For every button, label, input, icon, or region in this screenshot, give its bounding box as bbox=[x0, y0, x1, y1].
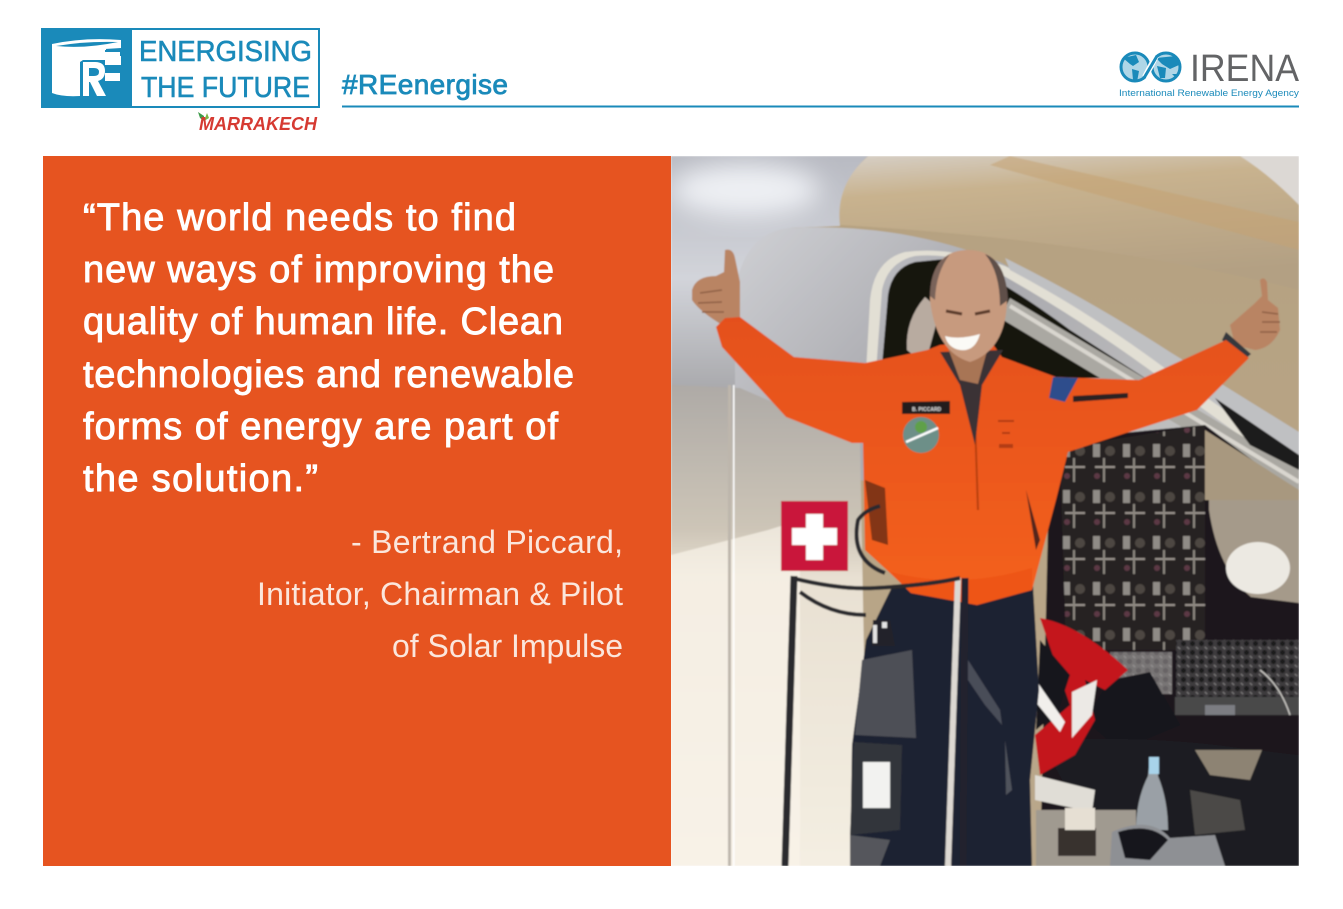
photo: cockpit strut bbox=[1000, 298, 1299, 500]
icon: Marrakech leaf bbox=[198, 112, 209, 121]
photo: stanchions and rope bbox=[785, 506, 965, 866]
photo: chest marks bbox=[998, 420, 1014, 448]
attribution: of Solar Impulse bbox=[392, 628, 623, 664]
attribution bbox=[257, 524, 623, 664]
logo: IRENA bbox=[1119, 48, 1300, 99]
photo: cabin interior right bbox=[1040, 424, 1299, 811]
quote text: new ways of improving the bbox=[83, 249, 554, 291]
attribution: Initiator, Chairman & Pilot bbox=[257, 576, 623, 612]
photo: dark bag bbox=[1108, 672, 1163, 696]
photo: arm skin, hands bbox=[692, 250, 1280, 350]
logo: blue RE emblem bbox=[41, 28, 131, 108]
photo: Swiss flag bbox=[781, 501, 848, 571]
photo: door frame bbox=[866, 250, 1244, 437]
logo text: agency name: International Renewable Energy Agency bbox=[1119, 88, 1299, 99]
photo: round window bbox=[1209, 500, 1299, 603]
photo: neck and collar bbox=[940, 350, 1003, 445]
photo: keys bbox=[872, 619, 877, 626]
photo: jacket bbox=[716, 317, 1249, 605]
photo: cockpit opening bbox=[882, 258, 1144, 380]
quote text: forms of energy are part of bbox=[83, 406, 558, 448]
photo: water bottle bbox=[1136, 757, 1168, 830]
attribution: - Bertrand Piccard, bbox=[351, 524, 623, 560]
photo: pilot with thumbs up at aircraft cockpit: B. PICCARD bbox=[912, 407, 942, 413]
logo: Energising the Future bbox=[41, 28, 319, 134]
photo: smile bbox=[945, 334, 980, 350]
photo: red life vest bbox=[1035, 618, 1128, 775]
quote text: “The world needs to find bbox=[83, 197, 516, 239]
photo background: wing and sky bbox=[796, 224, 1299, 866]
logo text: IRENA: IRENA bbox=[1190, 48, 1300, 90]
icon: infinity globes bbox=[1121, 53, 1180, 82]
quote text: the solution.” bbox=[83, 458, 318, 500]
photo: mission patch bbox=[903, 417, 939, 453]
photo: silver nacelle bbox=[734, 226, 1233, 481]
logo text: THE FUTURE: THE FUTURE bbox=[141, 72, 310, 104]
photo: wrist watch bbox=[1222, 332, 1251, 360]
photo: head bbox=[930, 250, 1007, 362]
quote text: quality of human life. Clean bbox=[83, 301, 563, 343]
photo: white cockpit edge bbox=[1215, 398, 1299, 470]
quote text bbox=[83, 197, 574, 500]
photo: pants bbox=[850, 585, 1039, 866]
photo: lower fuselage bbox=[671, 385, 868, 866]
photo: grey bag bottom bbox=[1110, 825, 1225, 866]
photo: control panel bbox=[1060, 425, 1205, 650]
photo: silver band above cockpit bbox=[1005, 258, 1299, 462]
photo: arm badge bbox=[1049, 377, 1078, 402]
photo: lower right switch panel bbox=[1176, 640, 1299, 698]
logo: outlined title box bbox=[131, 29, 319, 107]
logo text: MARRAKECH: MARRAKECH bbox=[199, 113, 318, 134]
header rule bbox=[342, 106, 1299, 108]
photo: knee label bbox=[863, 762, 890, 808]
photo: shelf and equipment bbox=[1175, 697, 1299, 715]
hashtag: #REenergise bbox=[342, 69, 508, 100]
panel: quote bbox=[43, 156, 671, 866]
photo: name badge bbox=[902, 401, 950, 414]
photo: wing root fairing bbox=[671, 156, 868, 400]
quote text: technologies and renewable bbox=[83, 354, 574, 396]
photo: knee pocket bbox=[850, 742, 902, 835]
photo: pilot with thumbs up at aircraft cockpit bbox=[670, 156, 1299, 866]
photo: white strap and box bbox=[1035, 775, 1095, 812]
logo text: ENERGISING: ENERGISING bbox=[139, 36, 312, 68]
photo: thigh pocket bbox=[855, 650, 916, 738]
